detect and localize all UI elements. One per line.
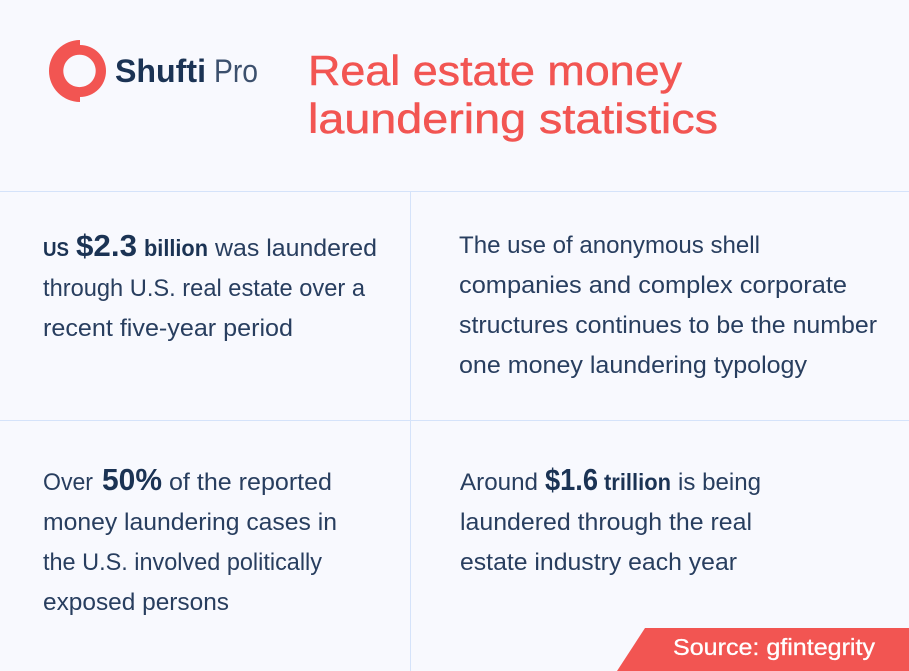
panel: over 50%: the U.S. involved politically	[43, 549, 322, 576]
panel: around $1.6 trillion: trillion	[604, 469, 671, 495]
panel: anonymous shell companies: The use of anonymous shell	[459, 232, 760, 259]
title	[308, 47, 718, 142]
panel: anonymous shell companies: one money laundering typology	[459, 352, 807, 379]
panel: anonymous shell companies: companies and complex corporate	[459, 272, 847, 299]
panel: over 50%: 50%	[102, 462, 162, 497]
panel: US $2.3 billion: $2.3	[76, 228, 137, 263]
logo wordmark	[115, 53, 258, 89]
panel: around $1.6 trillion: is being	[678, 469, 761, 496]
panel: US $2.3 billion: billion	[144, 235, 208, 261]
panel: over 50%	[43, 462, 337, 616]
title: Real estate money	[308, 47, 682, 94]
panel: around $1.6 trillion: $1.6	[545, 462, 598, 497]
panel: US $2.3 billion: was laundered	[214, 235, 377, 262]
panel: around $1.6 trillion: Around	[460, 469, 538, 496]
logo: Shufti Pro	[49, 40, 258, 102]
panel: anonymous shell companies: structures continues to be the number	[459, 312, 877, 339]
panel: over 50%: of the reported	[169, 469, 332, 496]
title: laundering statistics	[308, 95, 718, 142]
panel: around $1.6 trillion: laundered through the real	[460, 509, 752, 536]
panel: over 50%: Over	[43, 469, 93, 496]
panel: US $2.3 billion: through U.S. real estate over a	[43, 275, 366, 302]
icon: red ring	[49, 40, 106, 102]
panel: US $2.3 billion: US	[43, 239, 69, 261]
panel: over 50%: exposed persons	[43, 589, 229, 616]
logo wordmark: Pro	[214, 53, 258, 89]
panel: US $2.3 billion: recent five-year period	[43, 315, 293, 342]
panel: anonymous shell companies	[459, 232, 877, 379]
panel: over 50%: money laundering cases in	[43, 509, 337, 536]
panel: US $2.3 billion	[43, 228, 377, 342]
source banner: Source: gfintegrity	[673, 634, 876, 660]
source banner	[617, 628, 909, 671]
panel: around $1.6 trillion: estate industry each year	[460, 549, 737, 576]
panel: around $1.6 trillion	[460, 462, 761, 576]
logo wordmark: Shufti	[115, 53, 206, 89]
